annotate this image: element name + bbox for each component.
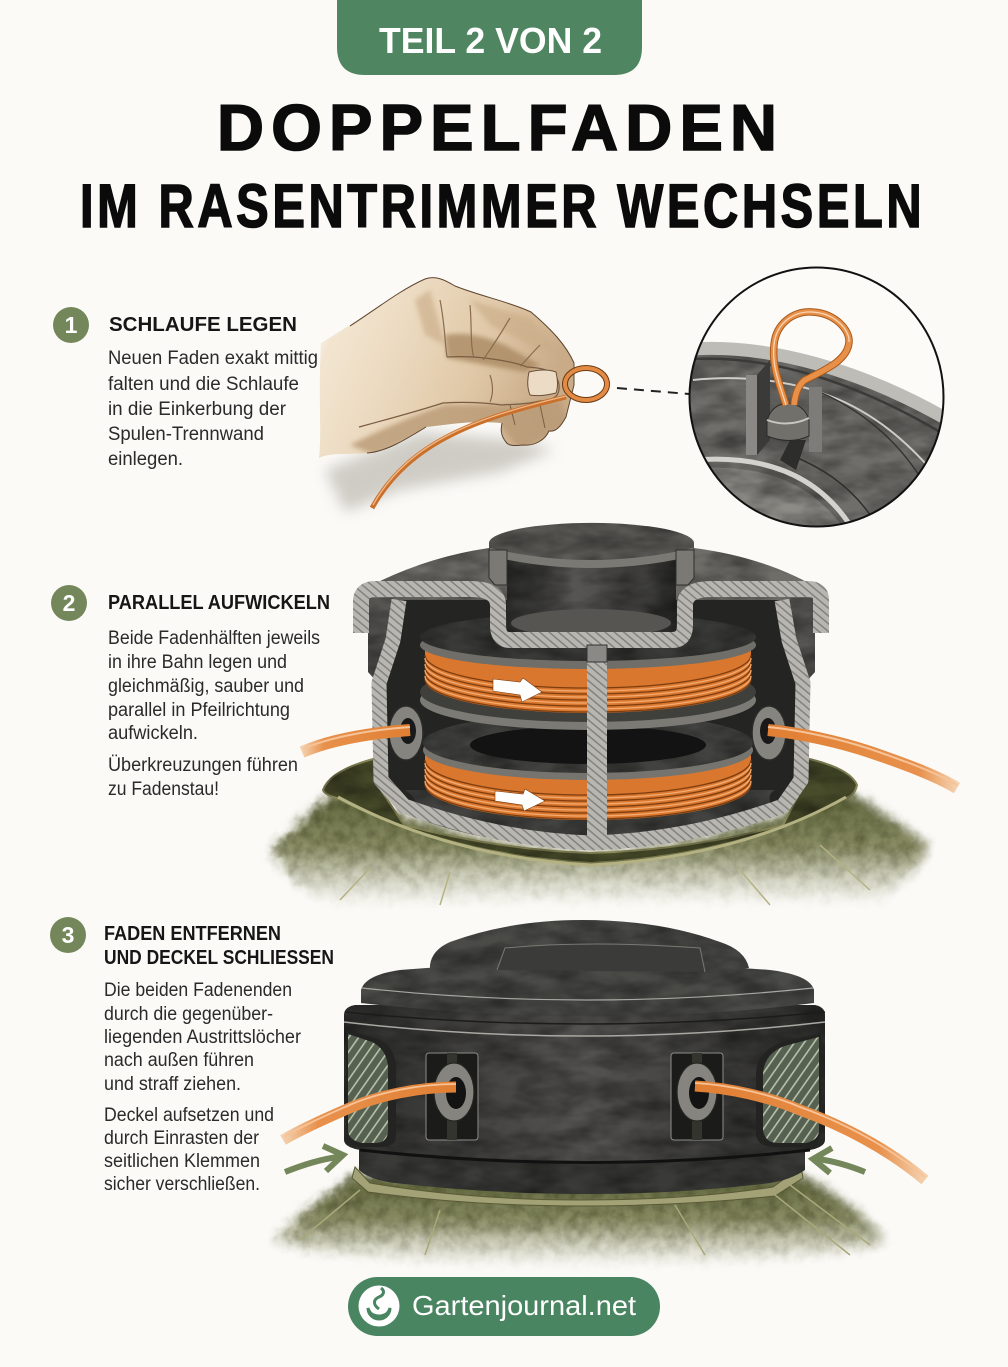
body band — [344, 1012, 825, 1162]
green trimmer housing — [274, 1167, 886, 1266]
arrow: left clamp pressed — [285, 1146, 343, 1172]
step 1 number badge: 1 — [65, 312, 78, 338]
step 3 body text: durch die gegenüber- — [104, 1004, 273, 1025]
step 3 number badge: 3 — [62, 922, 74, 948]
step 3 body text: seitlichen Klemmen — [104, 1151, 260, 1172]
step 3 body text: durch Einrasten der — [104, 1128, 260, 1149]
dark interior — [375, 597, 808, 848]
badge: Teil 2 von 2 — [337, 0, 642, 75]
step 3 heading: UND DECKEL SCHLIESSEN — [104, 946, 334, 969]
step 3 heading — [104, 922, 334, 969]
left thread — [283, 1084, 456, 1140]
illustration: closed spool head — [274, 920, 925, 1266]
illustration: spool cross-section — [272, 523, 957, 905]
step 1 body text: falten und die Schlaufe — [108, 374, 299, 395]
step 2 body text: Beide Fadenhälften jeweils — [108, 628, 320, 649]
step 3 body text: Die beiden Fadenenden — [104, 980, 292, 1001]
right window — [671, 1053, 723, 1140]
step 1 text — [53, 307, 318, 470]
green trimmer housing — [272, 758, 928, 905]
step 2 body text: parallel in Pfeilrichtung — [108, 700, 290, 721]
step 1 body text: Spulen-Trennwand — [108, 424, 264, 445]
center wall top — [587, 645, 607, 662]
lower thread coil — [425, 755, 751, 820]
step 3 body text: Deckel aufsetzen und — [104, 1105, 274, 1126]
middle flange — [420, 662, 756, 730]
spool floor — [405, 790, 775, 840]
badge: Teil 2 von 2: TEIL 2 VON 2 — [379, 20, 602, 61]
arrow: right clamp pressed — [813, 1148, 865, 1173]
cap top — [489, 523, 694, 585]
arrow: upper winding direction — [493, 678, 542, 702]
step 3 body text — [104, 980, 302, 1195]
step 2 body text: in ihre Bahn legen und — [108, 652, 287, 673]
title: DOPPELFADEN — [217, 91, 777, 164]
step 1 body text — [108, 348, 318, 470]
step 3 number badge — [50, 917, 86, 953]
arrow: lower winding direction — [495, 789, 545, 811]
left window — [426, 1053, 478, 1140]
step 1 body text: in die Einkerbung der — [108, 399, 287, 420]
step 2 body text: aufwickeln. — [108, 723, 198, 744]
left clamp — [346, 1030, 396, 1147]
step 1 body text: einlegen. — [108, 449, 183, 470]
outer hood surface — [359, 548, 824, 600]
lower ring — [359, 1140, 805, 1194]
step 3 text — [50, 917, 334, 1195]
step 3 heading: FADEN ENTFERNEN — [104, 922, 281, 945]
lid edge line — [362, 988, 813, 1000]
step 2 number badge: 2 — [63, 590, 75, 616]
step 1 number badge — [53, 307, 89, 343]
step 2 number badge — [51, 585, 87, 621]
side skirts — [368, 598, 815, 683]
step 2 body text: Überkreuzungen führen — [108, 755, 298, 776]
inner hub cylinder — [507, 558, 676, 637]
right clamp — [756, 1033, 821, 1147]
main body — [344, 1005, 825, 1161]
step 2 heading: PARALLEL AUFWICKELN — [108, 591, 330, 614]
step 1 body text: Neuen Faden exakt mittig — [108, 348, 318, 369]
dome — [430, 920, 749, 976]
dashed connector line — [617, 388, 689, 394]
step 2 body text — [108, 628, 320, 800]
step 3 body text: liegenden Austrittslöcher — [104, 1027, 302, 1048]
cross-section walls — [361, 589, 821, 843]
step 3 body text: nach außen führen — [104, 1050, 254, 1071]
illustration: hand holding thread loop — [319, 278, 607, 512]
upper thread coil — [425, 650, 751, 713]
lid — [361, 962, 814, 1016]
step 2 text — [51, 585, 330, 800]
step 1 heading: SCHLAUFE LEGEN — [109, 313, 297, 336]
lower flange — [423, 713, 753, 780]
icon: sprout logo — [358, 1286, 400, 1326]
title — [80, 91, 922, 240]
step 3 body text: sicher verschließen. — [104, 1174, 260, 1195]
step 3 body text: und straff ziehen. — [104, 1074, 241, 1095]
step 2 body text: gleichmäßig, sauber und — [108, 676, 304, 697]
detail circle: loop in spool notch — [689, 267, 945, 530]
step 2 body text: zu Fadenstau! — [108, 779, 219, 800]
upper flange — [420, 613, 756, 669]
right thread — [695, 1083, 925, 1180]
footer: Gartenjournal.net logo pill: Gartenjournal.net — [412, 1290, 636, 1321]
left thread exit — [302, 706, 423, 760]
title: IM RASENTRIMMER WECHSELN — [80, 172, 922, 240]
footer: Gartenjournal.net logo pill — [348, 1277, 660, 1336]
right thread exit — [752, 706, 957, 788]
